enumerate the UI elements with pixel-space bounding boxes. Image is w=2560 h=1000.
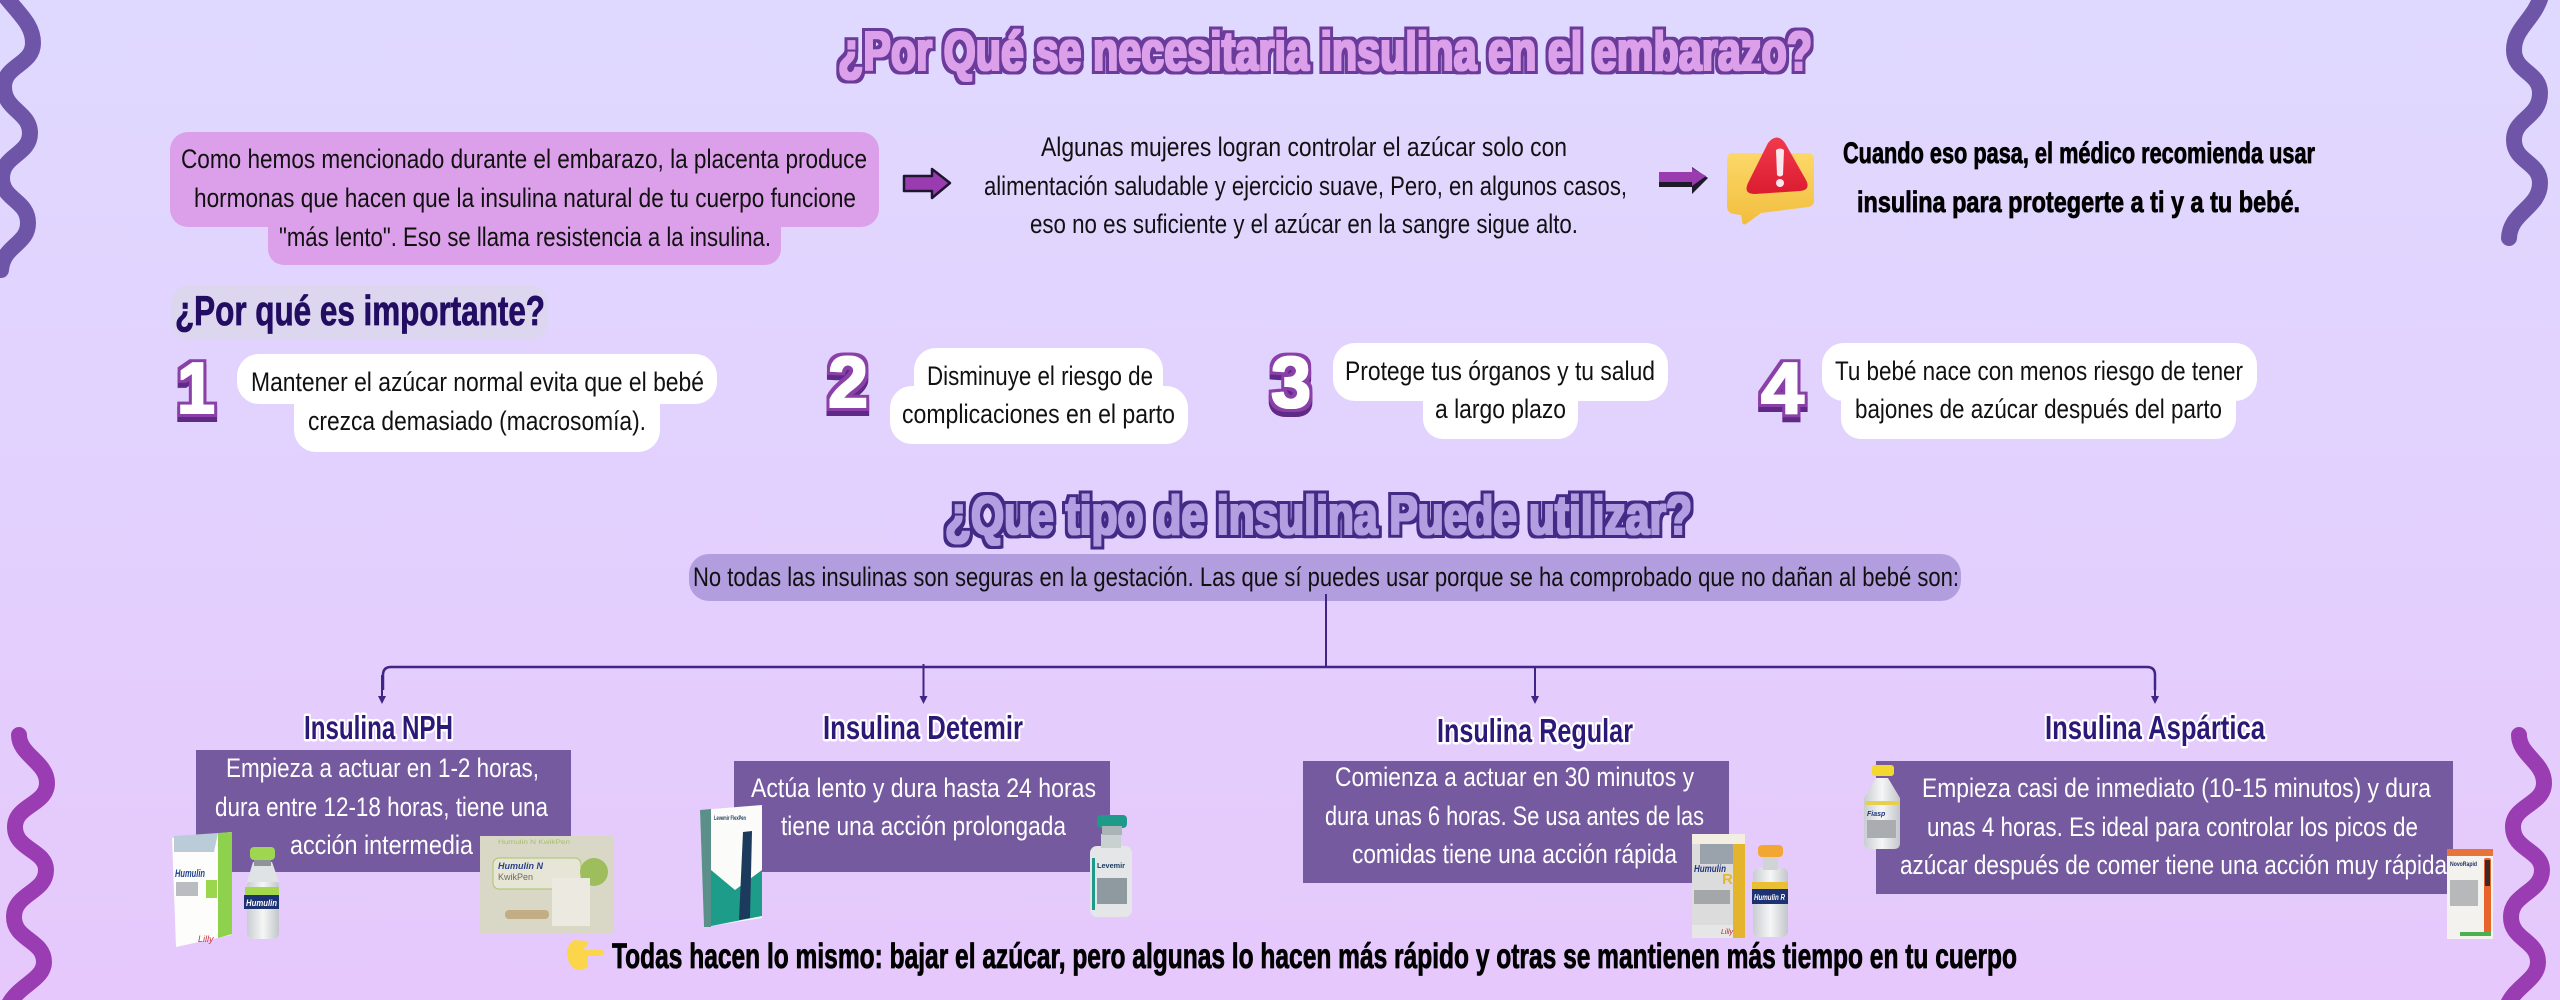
heading: Insulina Detemir: Insulina Detemir: [823, 709, 1023, 746]
connector tree arrows: [378, 594, 2159, 704]
title: ¿Por Qué se necesitaria insulina en el embarazo?: [838, 20, 1812, 82]
reason 1: crezca demasiado (macrosomía).: [308, 406, 646, 436]
panel: Regular description: comidas tiene una acción rápida: [1352, 839, 1678, 869]
heading: tipos de insulina: ¿Que tipo de insulina Puede utilizar?: [945, 484, 1692, 546]
reason 3: [1333, 343, 1668, 439]
product: NovoRapid box: [2447, 849, 2493, 939]
reason 4: [1822, 343, 2257, 439]
heading: por que es importante: [171, 285, 548, 340]
panel: placenta explanation: Como hemos mencionado durante el embarazo, la placenta produce: [181, 144, 867, 174]
text block: doctor recommendation: [1843, 137, 2315, 219]
reason 3: Protege tus órganos y tu salud: [1345, 356, 1655, 386]
reason 4: bajones de azúcar después del parto: [1855, 394, 2222, 424]
panel: placenta explanation: [170, 132, 879, 265]
reason 1: [237, 354, 717, 452]
panel: Regular description: dura unas 6 horas. Se usa antes de las: [1325, 801, 1704, 831]
arrow: placenta to diet text: [904, 169, 950, 198]
product: Levemir box: [700, 805, 762, 927]
product: Fiasp vial: Fiasp: [1867, 811, 1886, 818]
product: Humulin R vial: Humulin R: [1754, 893, 1785, 902]
product: Humulin R box: Lilly: [1721, 929, 1734, 936]
product: Humulin N box: Lilly: [198, 934, 214, 944]
product: Humulin R box: R: [1722, 871, 1733, 888]
panel: Aspartica description: [1876, 761, 2453, 894]
product: Levemir vial: [1090, 815, 1132, 917]
decorative squiggle: top right: [2509, 0, 2541, 238]
text block: diet and exercise: eso no es suficiente y el azúcar en la sangre sigue alto.: [1030, 209, 1578, 239]
number 3: 3: [1271, 343, 1311, 423]
panel: placenta explanation: "más lento". Eso se llama resistencia a la insulina.: [279, 222, 771, 252]
decorative squiggle: bottom right: [2507, 735, 2544, 1000]
panel: Detemir description: Actúa lento y dura hasta 24 horas: [751, 773, 1096, 803]
panel: NPH description: Empieza a actuar en 1-2 horas,: [226, 753, 539, 783]
number 4: 4: [1761, 349, 1804, 429]
panel: Regular description: Comienza a actuar en 30 minutos y: [1335, 762, 1694, 792]
decorative squiggle: top left: [1, 0, 33, 270]
product: Humulin N KwikPen photo: KwikPen: [498, 872, 533, 882]
icon: pointing hand: [567, 940, 604, 970]
panel: placenta explanation: hormonas que hacen que la insulina natural de tu cuerpo funcione: [194, 183, 856, 213]
heading: Insulina Aspartica: Insulina Aspártica: [2045, 709, 2266, 746]
text block: doctor recommendation: Cuando eso pasa, el médico recomienda usar: [1843, 137, 2315, 170]
product: Humulin N KwikPen photo: [480, 836, 614, 933]
reason 3: a largo plazo: [1435, 394, 1566, 424]
reason 4: Tu bebé nace con menos riesgo de tener: [1835, 356, 2243, 386]
text block: diet and exercise: Algunas mujeres logran controlar el azúcar solo con: [1041, 132, 1567, 162]
panel: NPH description: dura entre 12-18 horas, tiene una: [215, 792, 549, 822]
reason 2: [890, 348, 1188, 444]
heading: Insulina Regular: Insulina Regular: [1437, 712, 1633, 749]
reason 2: complicaciones en el parto: [902, 399, 1175, 429]
product: NovoRapid box: NovoRapid: [2450, 862, 2477, 868]
product: Humulin N vial: [244, 847, 279, 939]
icon: alert speech bubble: [1727, 138, 1814, 224]
panel: Regular description: [1303, 761, 1729, 883]
panel: NPH description: [196, 750, 571, 872]
heading: por que es importante: ¿Por qué es importante?: [175, 287, 545, 334]
subtitle pill: [689, 554, 1961, 601]
product: Humulin N KwikPen photo: Humulin N: [498, 861, 543, 871]
subtitle pill: No todas las insulinas son seguras en la gestación. Las que sí puedes usar porque se ha comprobado que no dañan al bebé son:: [693, 562, 1959, 592]
number 2: 2: [828, 343, 868, 423]
product: Humulin N vial: Humulin: [246, 898, 277, 908]
number 1: 1: [177, 349, 215, 429]
panel: Aspartica description: unas 4 horas. Es ideal para controlar los picos de: [1927, 812, 2418, 842]
arrow: diet text to alert: [1659, 167, 1708, 194]
product: Humulin R box: Humulin: [1694, 864, 1726, 875]
decorative squiggle: bottom left: [8, 735, 47, 1000]
reason 1: Mantener el azúcar normal evita que el bebé: [251, 367, 704, 397]
product: Humulin N KwikPen photo: Humulin N KwikPen: [498, 839, 570, 846]
panel: Aspartica description: Empieza casi de inmediato (10-15 minutos) y dura: [1922, 773, 2432, 803]
panel: Aspartica description: azúcar después de comer tiene una acción muy rápida: [1900, 850, 2448, 880]
panel: Detemir description: tiene una acción prolongada: [781, 811, 1067, 841]
closing statement: Todas hacen lo mismo: bajar el azúcar, pero algunas lo hacen más rápido y otras se mantienen más tiempo en tu cuerpo: [612, 937, 2017, 976]
product: Levemir vial: Levemir: [1097, 863, 1125, 870]
product: Humulin R vial: [1752, 845, 1788, 937]
text block: diet and exercise: alimentación saludable y ejercicio suave, Pero, en algunos casos,: [984, 171, 1627, 201]
product: Fiasp vial: [1864, 765, 1900, 849]
heading: Insulina NPH: Insulina NPH: [304, 709, 453, 746]
text block: diet and exercise: [984, 132, 1627, 239]
product: Humulin N box: [172, 832, 232, 947]
panel: Detemir description: [734, 761, 1110, 872]
product: Levemir box: Levemir FlexPen: [714, 816, 746, 822]
product: Humulin R box: [1692, 834, 1745, 938]
product: Humulin N box: Humulin: [175, 868, 205, 880]
text block: doctor recommendation: insulina para protegerte a ti y a tu bebé.: [1857, 186, 2300, 219]
reason 2: Disminuye el riesgo de: [927, 361, 1153, 391]
panel: NPH description: acción intermedia: [290, 830, 474, 860]
